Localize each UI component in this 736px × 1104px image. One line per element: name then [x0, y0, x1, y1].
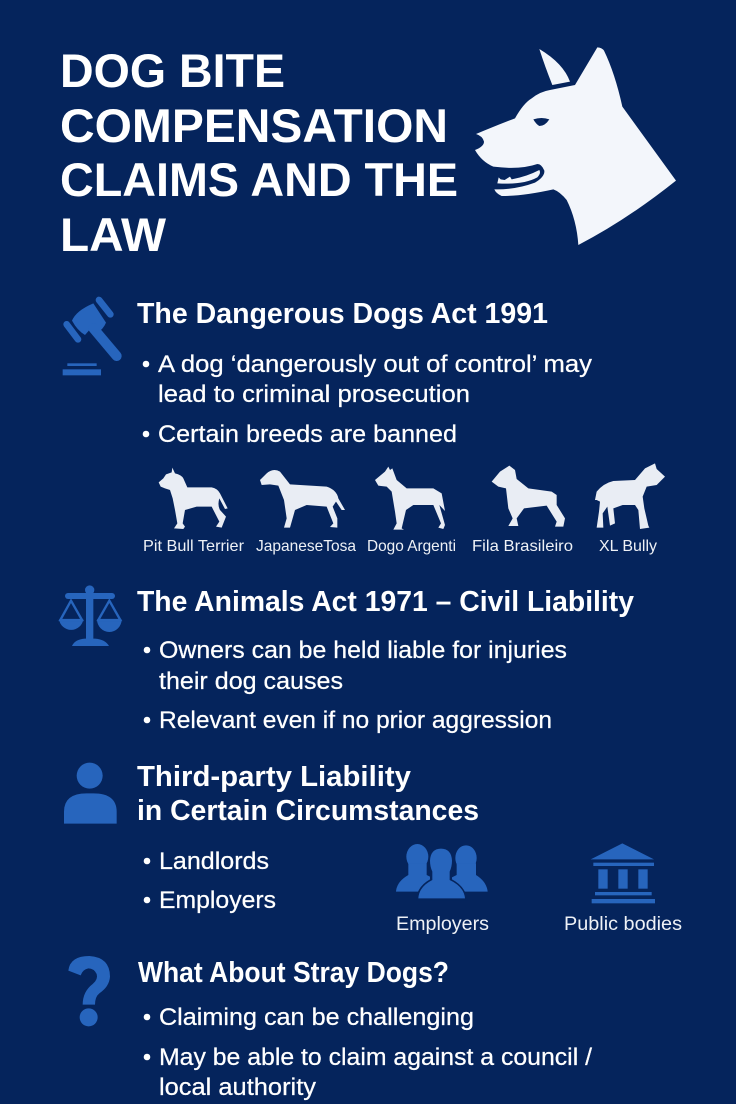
icon: Pit Bull Terrier — [159, 468, 228, 529]
icon: XL Bully — [595, 463, 665, 529]
icon: person — [64, 763, 117, 824]
banned breeds row — [143, 463, 665, 555]
bullet list: local authority — [159, 1074, 317, 1101]
bullet list: Relevant even if no prior aggression — [159, 707, 552, 734]
title: LAW — [60, 208, 167, 261]
breed labels: JapaneseTosa — [256, 538, 356, 555]
bullet list: lead to criminal prosecution — [158, 381, 470, 408]
icon: gavel — [63, 300, 117, 375]
heading: The Animals Act 1971 – Civil Liability — [137, 586, 634, 618]
label: employers: Employers — [396, 914, 489, 935]
heading: in Certain Circumstances — [137, 795, 479, 827]
panel: Animals Act — [59, 585, 634, 734]
bullet list: Owners can be held liable for injuries — [159, 637, 567, 664]
panel: Stray dogs — [68, 956, 592, 1101]
label: public bodies: Public bodies — [564, 914, 682, 935]
breed labels: Pit Bull Terrier — [143, 538, 245, 555]
bullet list — [144, 637, 567, 734]
bullet list — [144, 848, 276, 914]
heading — [137, 761, 479, 827]
breed labels: Dogo Argenti — [367, 538, 456, 555]
bullet list: Employers — [159, 887, 276, 914]
icon: question mark — [68, 956, 110, 1026]
bullet list: Claiming can be challenging — [159, 1004, 474, 1031]
title: DOG BITE — [60, 44, 285, 97]
icon: white dog head — [475, 47, 676, 245]
heading: The Dangerous Dogs Act 1991 — [137, 298, 548, 330]
icon: public building — [591, 843, 655, 903]
icon: scales of justice — [59, 585, 122, 646]
bullet list: May be able to claim against a council / — [159, 1044, 592, 1071]
heading: Third-party Liability — [137, 761, 411, 793]
title: CLAIMS AND THE — [60, 153, 458, 206]
icon: Dogo Argentino — [375, 467, 445, 530]
title: COMPENSATION — [60, 99, 448, 152]
icon: employers group — [396, 844, 488, 901]
breed labels — [143, 538, 657, 555]
icon: Fila Brasileiro — [492, 466, 565, 527]
bullet list: their dog causes — [159, 668, 343, 695]
panel: Third-party liability — [64, 761, 682, 935]
bullet list — [143, 351, 593, 448]
bullet list: Certain breeds are banned — [158, 421, 457, 448]
bullet list: A dog ‘dangerously out of control’ may — [158, 351, 593, 378]
panel: Dangerous Dogs Act — [63, 298, 665, 555]
icon: Japanese Tosa — [260, 470, 345, 528]
title — [60, 44, 458, 261]
heading: What About Stray Dogs? — [138, 957, 449, 989]
breed labels: XL Bully — [599, 538, 657, 555]
bullet list: Landlords — [159, 848, 269, 875]
bullet list — [144, 1004, 592, 1101]
breed labels: Fila Brasileiro — [472, 538, 573, 555]
